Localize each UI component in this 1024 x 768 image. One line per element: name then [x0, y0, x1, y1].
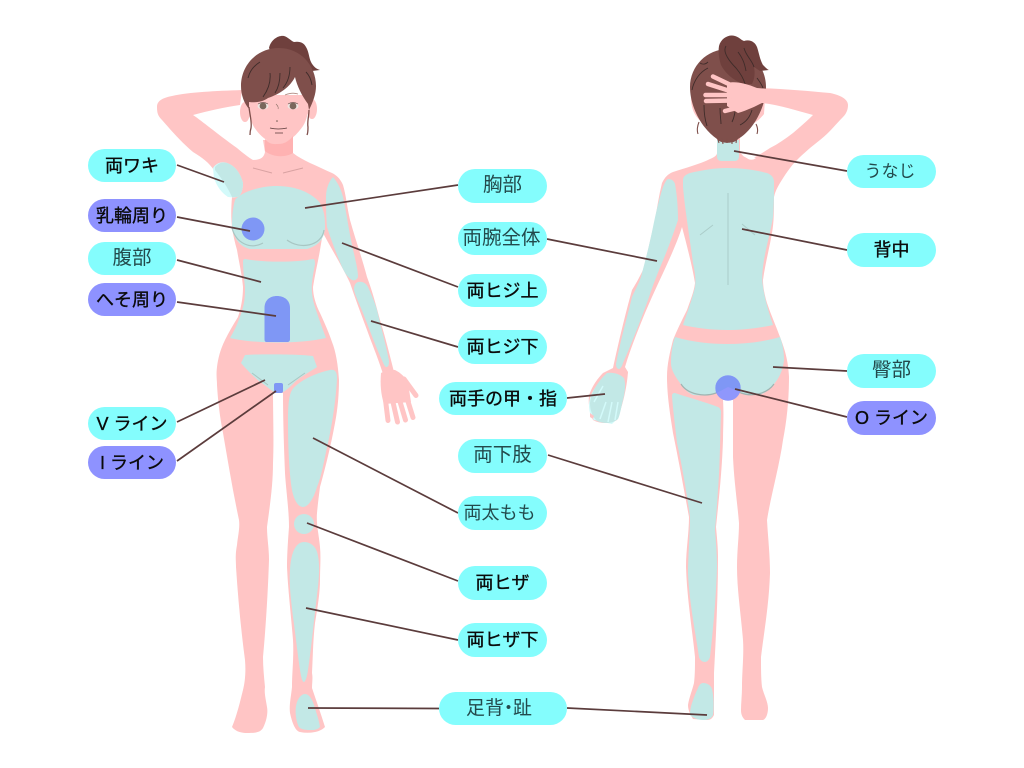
front hair strands [248, 62, 312, 97]
label: 両ヒザ [458, 566, 547, 600]
label: 両下肢: 両下肢 [473, 444, 532, 466]
label: 足背・趾: 足背 趾 [466, 698, 532, 719]
line: abdomen [177, 260, 261, 282]
line: nape [734, 151, 847, 171]
front armpit zone off skin [213, 162, 243, 197]
line: thigh [313, 438, 458, 513]
line: I line [177, 391, 276, 461]
O line zone [715, 375, 741, 401]
label: Vライン [88, 407, 176, 440]
label: 足背・趾 [439, 692, 567, 725]
label: Iライン: I ライン [100, 452, 164, 472]
front figure [157, 36, 416, 733]
front body silhouette [157, 90, 394, 733]
label: 両下肢 [458, 439, 547, 473]
front hair tufts [249, 107, 309, 135]
V line zone [241, 354, 317, 393]
line: O line [735, 389, 847, 417]
front mouth [270, 128, 287, 133]
back hand zone [589, 373, 625, 424]
label: 胸部: 胸部 [483, 174, 522, 196]
label: 乳輪周り [88, 199, 176, 232]
label: 両腕全体: 両腕全体 [462, 227, 540, 249]
label: 胸部 [458, 169, 547, 203]
front hand [381, 370, 416, 422]
gap between arm and neck [745, 156, 756, 160]
label: うなじ: うなじ [864, 162, 916, 181]
line: buttocks [773, 367, 847, 371]
lower leg zone [290, 542, 319, 682]
label: 両腕全体 [458, 222, 547, 255]
thigh zone [288, 370, 337, 507]
label: 両ワキ: 両ワキ [105, 156, 159, 176]
navel zone [264, 296, 290, 342]
back side tufts [697, 122, 758, 144]
line: upper arm [342, 243, 458, 287]
label: 両ヒジ上: 両ヒジ上 [466, 280, 538, 300]
chest zone [232, 186, 325, 249]
label: Oライン [847, 401, 936, 435]
label: 乳輪周り: 乳輪周り [96, 206, 168, 226]
back hair strands [692, 46, 763, 126]
label: へそ周り [88, 283, 176, 316]
label: 両ヒジ下 [458, 330, 547, 364]
line: back [742, 229, 847, 250]
upper arm zone [326, 177, 358, 280]
buttocks zone [671, 337, 784, 395]
label: 両ヒジ上 [458, 274, 547, 307]
back body silhouette [589, 88, 848, 720]
areola zone [242, 218, 264, 240]
forearm zone [354, 282, 389, 367]
label: 両太もも [458, 496, 547, 530]
label: 腹部: 腹部 [112, 247, 152, 269]
line: chest [305, 185, 458, 208]
label: へそ周り: へそ周り [96, 290, 168, 310]
back hand on head [706, 76, 770, 113]
back leg zone [672, 393, 721, 662]
back arm zone [616, 179, 678, 369]
label: 背中: 背中 [874, 240, 910, 260]
leader lines [177, 151, 847, 715]
groin lines [252, 373, 305, 385]
label: 臀部: 臀部 [872, 359, 911, 381]
label: 両ヒザ下: 両ヒザ下 [466, 630, 538, 650]
label: 両ワキ [88, 149, 176, 182]
line: lower leg [306, 608, 458, 640]
label: 背中 [847, 233, 936, 267]
line: armpit [177, 165, 224, 182]
collarbones [253, 168, 303, 173]
label: 両ヒザ下 [458, 623, 547, 657]
label: 腹部 [88, 242, 176, 275]
label: Vライン: V ライン [96, 414, 168, 434]
label: 両ヒザ: 両ヒザ [476, 573, 530, 593]
back head hair [690, 49, 766, 143]
back figure [589, 35, 848, 720]
back zone [683, 168, 774, 330]
line: legs [548, 455, 702, 503]
right ear [307, 99, 317, 119]
line: hand [567, 394, 605, 398]
line: V line [177, 380, 265, 422]
foot zone [296, 694, 320, 730]
line: navel [177, 302, 276, 316]
label: 足背・趾: ・ [499, 698, 518, 719]
label: 臀部 [847, 354, 936, 388]
label: Iライン [88, 446, 176, 479]
breast contour lines [232, 228, 324, 246]
label: 両太もも: 両太もも [464, 503, 536, 523]
label: Oライン: O ライン [855, 408, 928, 428]
front hair bun [269, 36, 320, 71]
neck shadow [265, 136, 293, 156]
front armpit zone on skin [215, 162, 243, 197]
front hair [241, 48, 316, 110]
back bun [719, 35, 769, 84]
front eyes [258, 93, 298, 122]
label: うなじ [847, 155, 936, 188]
line: whole arm [547, 239, 657, 261]
abdomen zone [230, 259, 326, 342]
line: foot back [567, 708, 707, 715]
line: areola [177, 217, 250, 231]
label: 両ヒジ下: 両ヒジ下 [466, 337, 538, 357]
label: 両手の甲・指 [439, 382, 567, 415]
line: knee [307, 523, 458, 581]
line: forearm [371, 321, 458, 347]
knee zone [294, 514, 314, 534]
line: foot front [308, 707, 439, 710]
front face [248, 95, 308, 144]
left ear [240, 102, 250, 122]
back ears skin [691, 98, 765, 128]
back anatomy lines [700, 193, 755, 285]
back foot zone [690, 683, 714, 720]
buttocks crease line [681, 384, 774, 395]
nape zone [717, 140, 739, 161]
I line zone [274, 383, 283, 393]
label: 両手の甲・指: 両手の甲・指 [449, 388, 557, 408]
